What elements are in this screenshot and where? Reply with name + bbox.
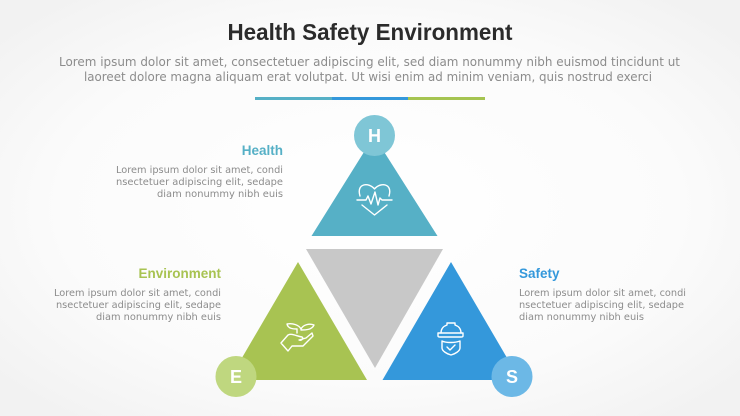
center gray triangle bbox=[306, 249, 443, 368]
text block: environment bbox=[54, 266, 221, 323]
panel: safety triangle bbox=[382, 262, 532, 397]
text block: health: nsectetuer adipiscing elit, sedape bbox=[116, 177, 283, 188]
subtitle text bbox=[59, 54, 680, 84]
text block: safety bbox=[519, 266, 686, 323]
text block: environment: nsectetuer adipiscing elit, sedape bbox=[56, 300, 221, 311]
text block: environment: Environment bbox=[138, 266, 221, 281]
icon: hand with plant bbox=[281, 324, 314, 351]
text block: health: Health bbox=[242, 143, 283, 158]
subtitle text: Lorem ipsum dolor sit amet, consectetuer adipiscing elit, sed diam nonummy nibh euismod tincidunt ut bbox=[59, 54, 680, 69]
icon: helmet and shield bbox=[438, 323, 463, 355]
tricolor divider bbox=[255, 97, 485, 100]
text block: environment: diam nonummy nibh euis bbox=[96, 312, 221, 323]
badge S bbox=[492, 356, 532, 397]
panel: health triangle bbox=[312, 115, 438, 236]
icon: heart with pulse bbox=[357, 185, 392, 215]
text block: health: diam nonummy nibh euis bbox=[157, 189, 283, 200]
title: Health Safety Environment bbox=[228, 19, 513, 45]
text block: environment: Lorem ipsum dolor sit amet, condi bbox=[54, 288, 221, 299]
subtitle text: laoreet dolore magna aliquam erat volutpat. Ut wisi enim ad minim veniam, quis nostrud exerci bbox=[84, 69, 652, 84]
text block: safety: nsectetuer adipiscing elit, sedape bbox=[519, 300, 684, 311]
text block: safety: Lorem ipsum dolor sit amet, condi bbox=[519, 288, 686, 299]
badge H: H bbox=[368, 126, 381, 146]
text block: safety: Safety bbox=[519, 266, 560, 281]
badge E: E bbox=[230, 367, 242, 387]
badge E bbox=[216, 356, 256, 397]
text block: health bbox=[116, 143, 283, 200]
badge S: S bbox=[506, 367, 518, 387]
text block: safety: diam nonummy nibh euis bbox=[519, 312, 644, 323]
panel: environment triangle bbox=[216, 262, 367, 397]
text block: health: Lorem ipsum dolor sit amet, condi bbox=[116, 165, 283, 176]
